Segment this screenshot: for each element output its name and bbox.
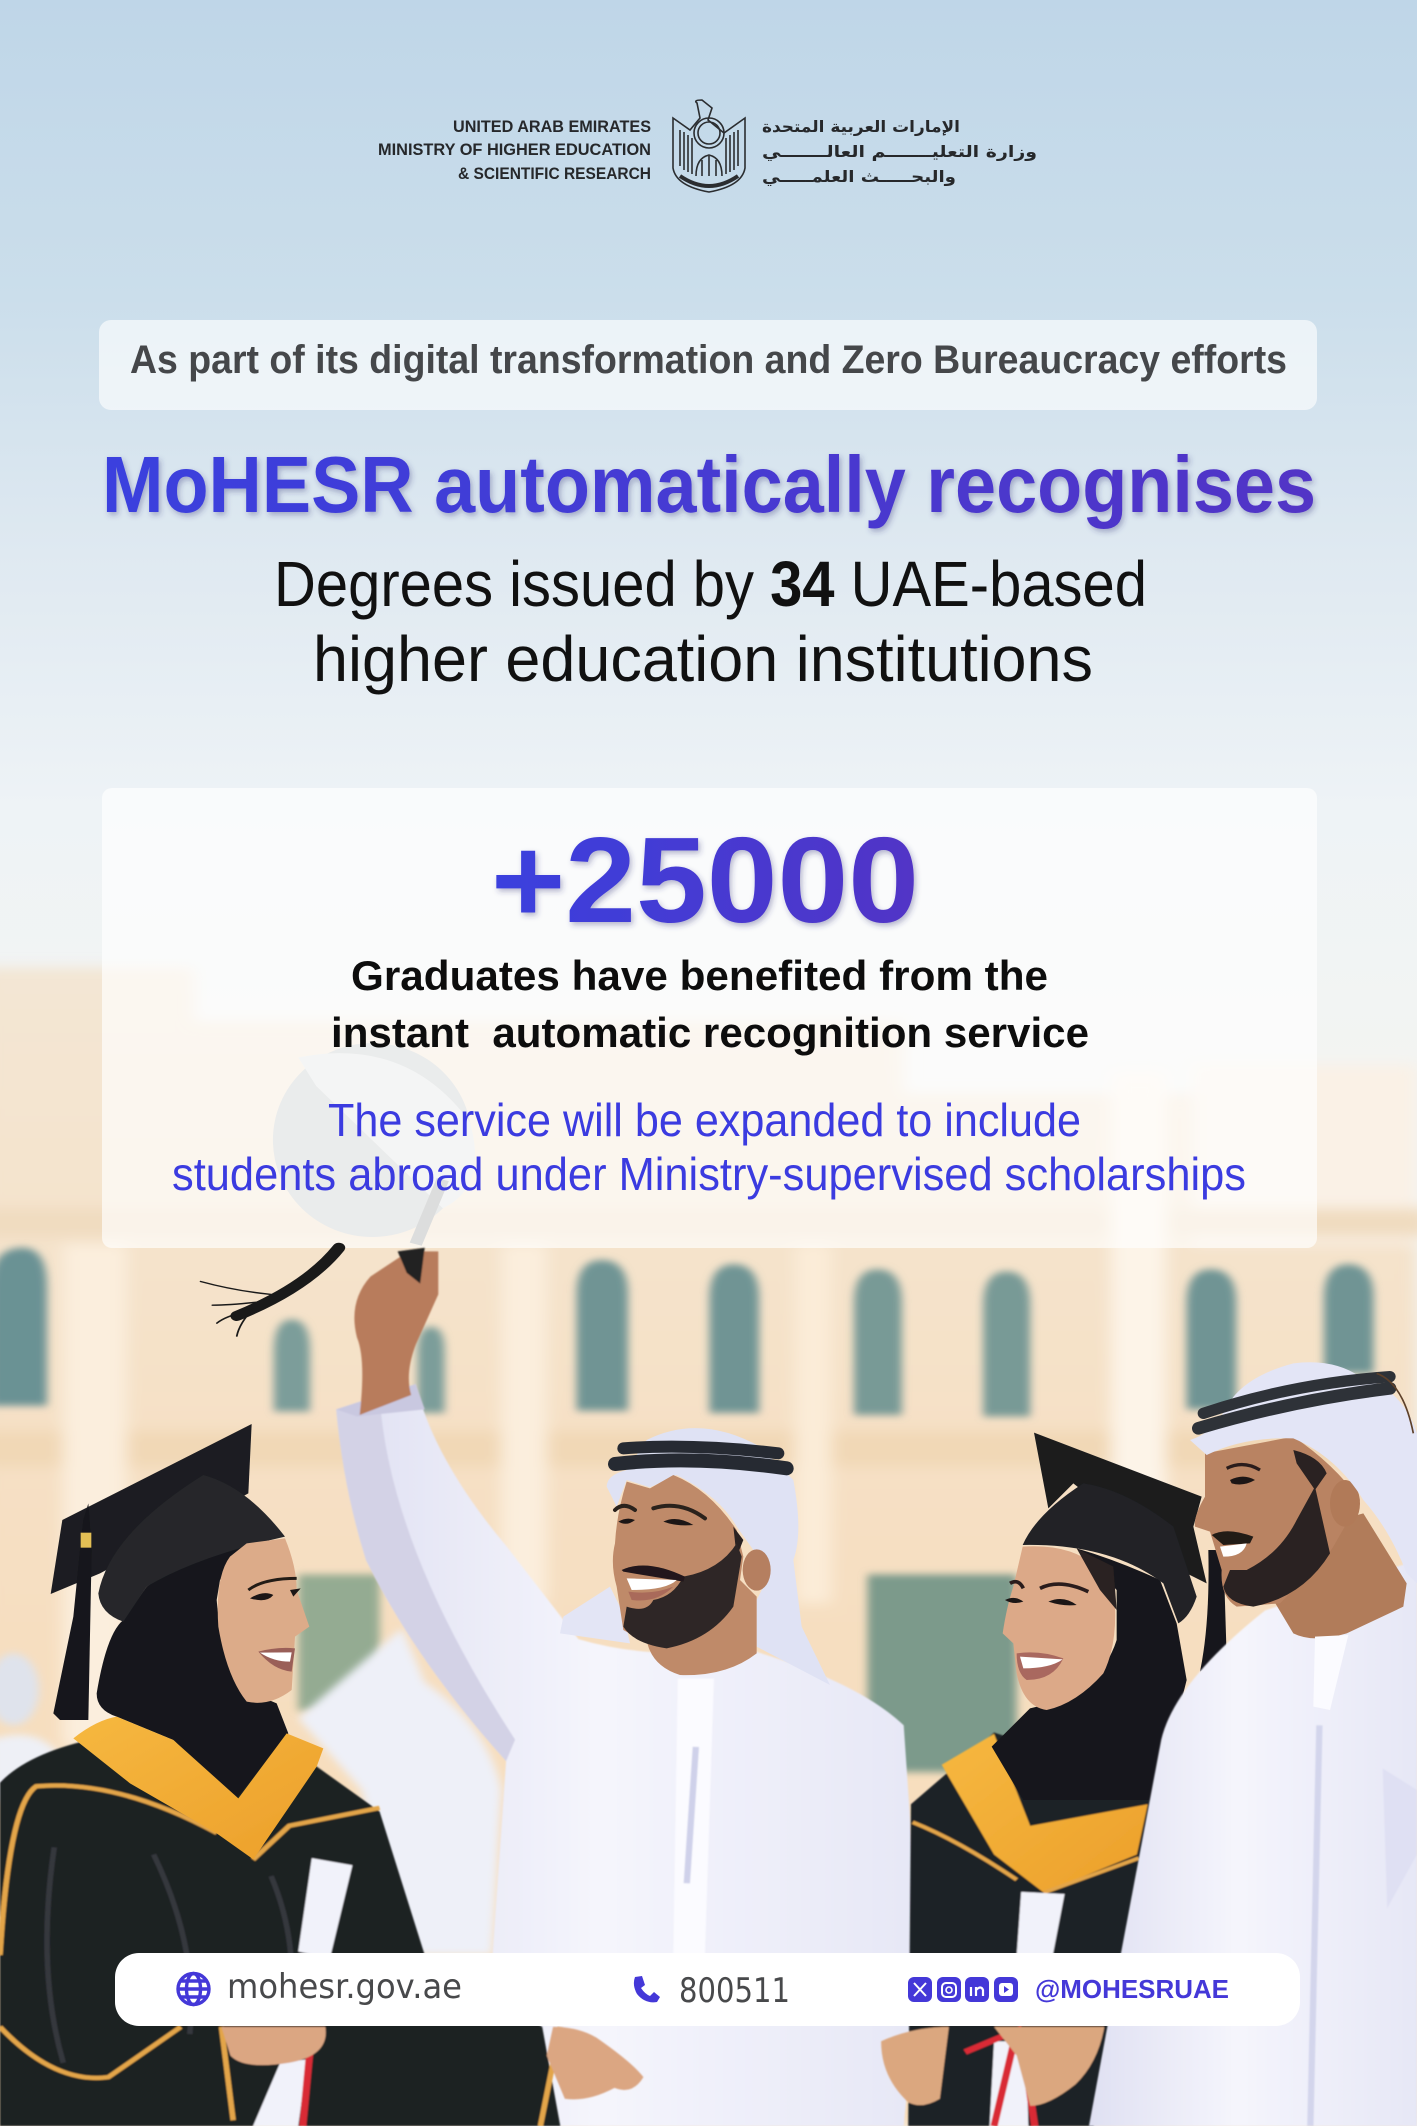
logo text: English: UNITED ARAB EMIRATES <box>453 117 651 136</box>
gown <box>881 1732 1166 2126</box>
head <box>560 1428 830 1685</box>
subtitle: higher education institutions <box>313 623 1093 695</box>
icon: social media <box>908 1977 1018 2002</box>
head <box>1190 1362 1417 1710</box>
head, cap and hood <box>51 1424 323 1859</box>
cap tassel and raised arm <box>201 1248 339 1336</box>
figure: left graduate <box>0 1424 643 2126</box>
tossed graduation cap <box>273 1043 475 1244</box>
illustration: graduates <box>0 1248 1417 2126</box>
social handle: @MOHESRUAE <box>1035 1974 1229 2004</box>
gown <box>0 1740 643 2126</box>
subtitle: Degrees issued by 34 UAE-based <box>274 548 1147 620</box>
expansion note <box>172 1094 1246 1200</box>
icon: phone <box>634 1976 660 2002</box>
expansion note: The service will be expanded to include <box>328 1094 1081 1146</box>
statistic description: instant automatic recognition service <box>331 1009 1089 1056</box>
logo text: English <box>378 117 651 183</box>
intro strip: As part of its digital transformation and Zero Bureaucracy efforts <box>130 338 1287 382</box>
logo text: Arabic <box>762 117 1037 187</box>
logo text: Arabic: والبحـــــث العلمـــــي <box>762 167 956 187</box>
contact bar <box>115 1953 1300 2026</box>
statistic description <box>331 952 1089 1056</box>
icon: globe <box>178 1974 209 2004</box>
logo text: English: & SCIENTIFIC RESEARCH <box>458 164 651 183</box>
icon: UAE emblem <box>673 100 745 192</box>
intro strip <box>99 320 1317 410</box>
background: blurred campus building <box>0 968 1417 2126</box>
background figures <box>0 1628 502 1955</box>
panel: statistics <box>102 788 1317 1248</box>
thobe <box>1089 1560 1417 2126</box>
head, cap and tassel <box>992 1433 1227 1800</box>
title: MoHESR automatically recognises <box>102 440 1316 529</box>
statistic: +25000: +25000 <box>491 812 919 948</box>
thobe and raised arm <box>336 1248 920 2126</box>
figure: centre man <box>336 1248 920 2126</box>
phone number: 800511 <box>679 1971 790 2011</box>
logo: ministry header <box>378 100 1037 192</box>
figure: right graduate <box>881 1433 1227 2126</box>
subtitle <box>274 548 1147 695</box>
website: mohesr.gov.ae <box>227 1967 462 2007</box>
expansion note: students abroad under Ministry-supervised scholarships <box>172 1148 1246 1200</box>
statistic description: Graduates have benefited from the <box>351 952 1048 999</box>
figure: right man <box>1089 1362 1417 2126</box>
logo text: Arabic: الإمارات العربية المتحدة <box>762 117 960 136</box>
logo text: English: MINISTRY OF HIGHER EDUCATION <box>378 140 651 159</box>
logo text: Arabic: وزارة التعليـــــــم العالـــــــي <box>762 142 1037 162</box>
